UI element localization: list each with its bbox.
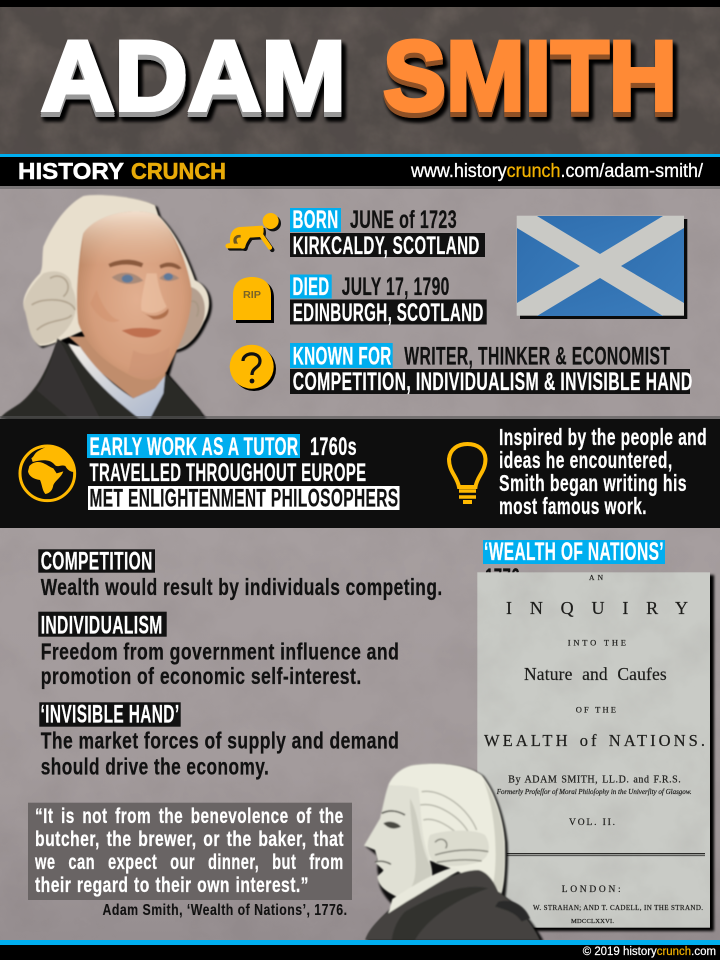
book title page: By ADAM SMITH, LL.D. and F.R.S. [508,775,681,786]
known for row [230,342,693,396]
concept: invisible hand: The market forces of supply and demand [41,727,399,753]
wig [23,195,209,351]
concept: competition [38,547,443,600]
heading: wealth of nations [483,538,665,591]
header bar: CRUNCH [131,158,226,184]
header bar [0,154,720,186]
born row: JUNE of 1723 [350,206,457,234]
panel: title band [0,0,720,154]
concept: individualism: promotion of economic self-interest. [41,663,362,689]
died row: DIED [292,273,330,301]
title: Adam Smith [41,20,677,131]
died row: EDINBURGH, SCOTLAND [293,299,484,327]
icon: tombstone [233,277,274,323]
wig curls [428,831,489,866]
icon: globe [20,446,75,501]
book title page: Nature and Caufes [524,664,667,684]
face [77,211,192,380]
footer bar: © 2019 historycrunch.com [583,946,716,958]
portrait: engraved Adam Smith profile [364,764,544,941]
coat [0,338,204,419]
cravat [388,868,461,913]
concept: competition: COMPETITION [41,547,153,575]
heading: wealth of nations: 1776 [485,564,520,591]
died row [233,273,487,327]
concept: invisible hand [39,701,399,779]
book title page: VOL. II. [569,818,615,828]
known for row: KNOWN FOR [293,342,392,370]
born row: KIRKCALDY, SCOTLAND [293,232,480,260]
panel: biography background [0,186,720,419]
neck [68,337,167,398]
concept: invisible hand: should drive the economy. [41,753,269,779]
footer bar [0,940,720,960]
quote block: “It is not from the benevolence of the [35,805,344,828]
engraved figure [364,764,540,940]
book title page: OF THE [576,705,616,715]
concept: individualism: Freedom from government influence and [41,638,399,664]
title: Adam Smith: SMITH [383,20,677,131]
coat [365,870,540,940]
book title page [477,572,714,931]
quote block: butcher, the brewer, or the baker, that [35,828,344,851]
book title page: W. STRAHAN; AND T. CADELL, IN THE STRAND. [533,904,703,912]
painted figure [0,195,209,419]
panel: early work band [0,416,720,528]
icon: light bulb [449,444,486,502]
book title page: LONDON: [562,885,621,895]
quote attribution: Adam Smith, ‘Wealth of Nations’, 1776. [102,902,348,919]
icon: crawling baby [225,213,281,251]
portrait: painted Adam Smith [0,195,212,421]
book title page: INQUIRY [506,598,688,618]
quote block [28,803,352,900]
died row: JULY 17, 1790 [342,273,450,301]
book title page: WEALTH of NATIONS. [484,731,705,750]
born row [225,206,485,260]
concept: invisible hand: ‘INVISIBLE HAND’ [40,701,180,729]
quote block: their regard to their own interest.” [35,874,309,897]
born row: BORN [292,206,338,234]
text: inspired: most famous work. [499,493,647,519]
icon: tombstone: RIP [243,290,261,301]
flag of Scotland [517,216,687,319]
concept: competition: Wealth would result by individuals competing. [41,574,443,600]
book title page: MDCCLXXVI. [571,918,614,925]
panel: early work band: EARLY WORK AS A TUTOR [90,433,298,461]
quote block: we can expect our dinner, but from [34,851,344,874]
concept: individualism: INDIVIDUALISM [41,611,163,639]
panel: early work band: MET ENLIGHTENMENT PHILOSOPHERS [90,485,398,513]
profile face [364,785,432,897]
facial features [108,260,143,267]
book title page: INTO THE [568,638,626,648]
concept: individualism [38,611,399,689]
panel: early work band: 1760s [310,433,357,461]
panel: early work band: TRAVELLED THROUGHOUT EUROPE [90,459,366,487]
book title page: AN [589,573,604,582]
book title page: Formerly Profeſſor of Moral Philoſophy in the Univerſity of Glasgow. [496,787,692,796]
header bar: www.historycrunch.com/adam-smith/ [410,161,704,182]
collar [68,343,165,419]
title: Adam Smith: ADAM [41,20,346,131]
wig [388,764,505,893]
header bar: HISTORY [18,158,124,184]
icon: question mark [230,345,276,391]
panel: ideas background [0,528,720,940]
text: inspired [499,424,707,519]
